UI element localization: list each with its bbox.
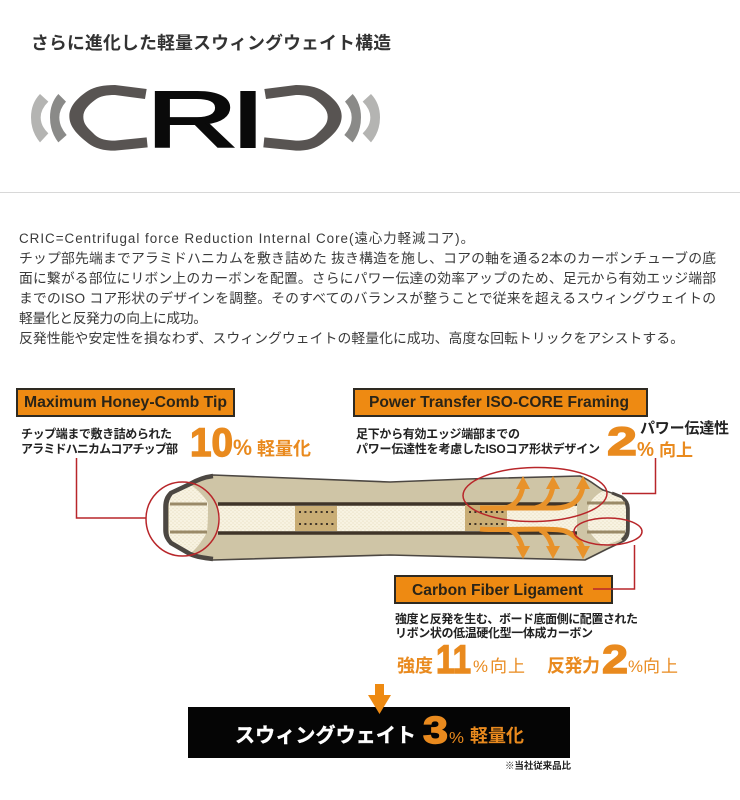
stat: 10%: 軽量化	[257, 439, 311, 459]
description text: チップ部先端までアラミドハニカムを敷き詰めた 抜き構造を施し、コアの軸を通る2本のカーボンチューブの底	[19, 250, 716, 266]
red circle: tip	[146, 482, 219, 556]
logo: CRIC: R	[146, 75, 238, 164]
label box: Power Transfer ISO-CORE Framing	[369, 394, 629, 411]
title: さらに進化した軽量スウィングウェイト構造	[31, 32, 391, 53]
description	[395, 611, 638, 640]
snowboard diagram	[146, 466, 642, 560]
description text: 反発性能や安定性を損なわず、スウィングウェイトの軽量化に成功、高度な回転トリックをアシストする。	[19, 330, 684, 346]
description	[356, 426, 600, 456]
stat: strength 11%: 11	[436, 638, 471, 682]
stat: 2%: %	[637, 439, 654, 461]
stat: 10%	[190, 421, 311, 465]
arrow down	[368, 684, 391, 714]
leader lines	[76, 458, 656, 518]
description: 足下から有効エッジ端部までの	[356, 426, 520, 441]
stat: strength 11%: 向上	[490, 657, 525, 676]
label box: Maximum Honey-Comb Tip	[24, 394, 227, 411]
carbon tube bars	[218, 504, 577, 533]
stat: rebound 2%: 2	[602, 638, 628, 682]
callout: Maximum Honey-Comb Tip	[17, 389, 311, 465]
right tip edge	[612, 493, 628, 540]
result bar	[188, 707, 570, 758]
stat: 3%: 3	[423, 710, 448, 752]
logo: CRIC	[31, 75, 380, 164]
red ellipse: carbon	[574, 518, 642, 545]
footnote: ※当社従来品比	[505, 760, 571, 772]
left tip edge	[166, 476, 213, 559]
stat: 3%: 軽量化	[470, 726, 524, 746]
stat: rebound 2%: 反発力	[547, 656, 600, 676]
description text: 面に繋がる部位にリボン上のカーボンを配置。さらにパワー伝達の効率アップのため、足元から有効エッジ端部	[19, 271, 716, 286]
stat: 2%: パワー伝達性	[640, 420, 729, 437]
description: アラミドハニカムコアチップ部	[21, 441, 178, 456]
callout: Power Transfer ISO-CORE Framing	[354, 389, 729, 464]
stat: strength 11%: %	[473, 657, 488, 676]
description: パワー伝達性を考慮したISOコア形状デザイン	[356, 441, 600, 456]
leader line	[593, 545, 634, 589]
label box	[17, 389, 234, 416]
description text: までのISO コア形状のデザインを調整。そのすべてのバランスが整うことで従来を超えるスウィングウェイトの	[19, 290, 716, 306]
stat: 2%: 向上	[659, 441, 693, 460]
logo: CRIC: I	[230, 75, 266, 164]
stat: strength 11%: 強度	[397, 656, 433, 676]
label box: Carbon Fiber Ligament	[412, 582, 583, 599]
callout: Carbon Fiber Ligament	[395, 545, 678, 682]
stat: rebound 2%: 向上	[643, 657, 678, 676]
result text: スウィングウェイト	[235, 723, 416, 747]
description: リボン状の低温硬化型一体成カーボン	[395, 625, 593, 640]
label box	[395, 576, 612, 603]
stat: 2%	[607, 420, 729, 464]
stat: 10%: %	[233, 435, 252, 460]
orange arrows: lower flow	[480, 529, 590, 559]
stat: 2%: 2	[607, 420, 637, 464]
description text: 軽量化と反発力の向上に成功。	[19, 311, 207, 326]
orange arrows: upper flow	[480, 476, 590, 508]
stat: strength 11%	[397, 638, 525, 682]
core honeycomb	[218, 504, 577, 533]
stat: rebound 2%: %	[628, 657, 643, 676]
stat: 10%: 10	[190, 421, 233, 465]
right tip honeycomb	[588, 491, 627, 546]
description text: CRIC=Centrifugal force Reduction Internal Core(遠心力軽減コア)。	[19, 230, 474, 246]
description: チップ端まで敷き詰められた	[21, 426, 172, 441]
right insert patch	[465, 505, 507, 531]
stat: 3%	[423, 710, 524, 752]
tip ribbons	[170, 503, 625, 532]
left insert patch	[295, 506, 337, 531]
red ellipse: ISO core	[463, 466, 607, 523]
description: 強度と反発を生む、ボード底面側に配置された	[395, 611, 638, 626]
stat: 3%: %	[449, 730, 464, 747]
board body	[164, 475, 629, 560]
description	[21, 426, 178, 456]
stat: rebound 2%	[547, 638, 678, 682]
label box	[354, 389, 647, 416]
description text	[19, 230, 716, 346]
left tip honeycomb	[169, 484, 208, 554]
